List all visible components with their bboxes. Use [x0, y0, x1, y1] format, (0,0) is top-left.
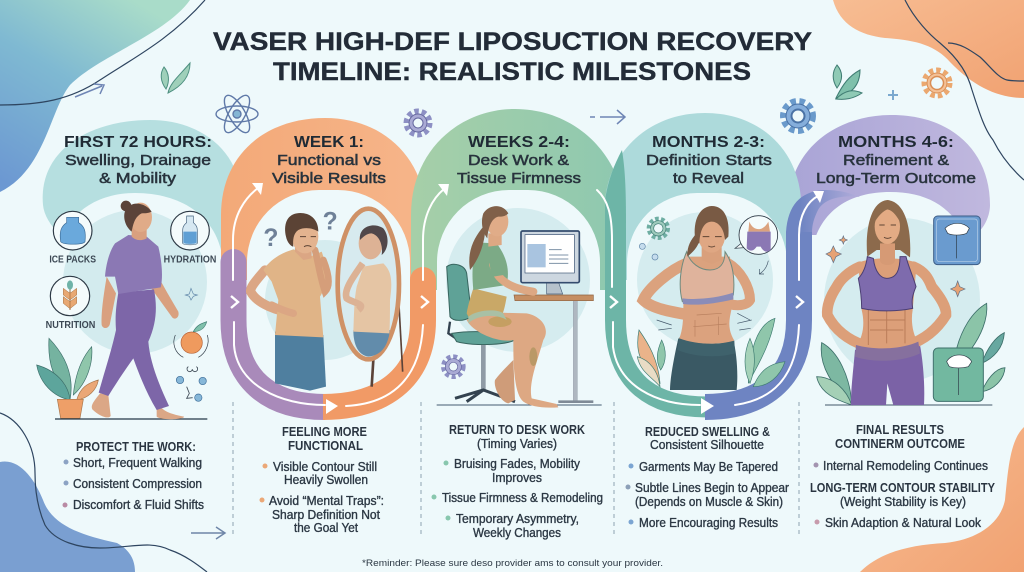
icon: gear purple	[406, 111, 430, 135]
heading: week 1: Visible Results	[272, 170, 386, 187]
heading: weeks 2-4: WEEKS 2-4:	[468, 134, 570, 151]
dividers	[233, 402, 799, 537]
figure: woman walking	[92, 201, 184, 419]
band: orange U	[323, 280, 423, 407]
icon: ice packs: ICE PACKS	[49, 254, 96, 265]
text block: final results: LONG-TERM CONTOUR STABILITY	[810, 481, 996, 495]
band arrows	[231, 183, 824, 414]
heading: months 4-6: MONTHS 4-6:	[838, 134, 954, 151]
text block: reduced swelling: REDUCED SWELLING &	[645, 425, 770, 439]
text block: return to desk work	[432, 423, 603, 540]
text block: reduced swelling: Subtle Lines Begin to Appear	[635, 481, 789, 495]
text block: feeling more functional: Sharp Definition Not	[272, 508, 380, 522]
text block: return to desk work: (Timing Varies)	[477, 437, 557, 451]
blob: top right	[833, 0, 1024, 98]
motion lines	[657, 313, 752, 330]
heading: first 72 hours: FIRST 72 HOURS:	[64, 134, 212, 151]
icon: plant	[37, 338, 98, 418]
panel: first 72 hours window	[58, 193, 222, 420]
heading: first 72 hours	[64, 134, 212, 187]
text block: feeling more functional: the Goal Yet	[294, 521, 358, 535]
title: TIMELINE: REALISTIC MILESTONES	[273, 58, 751, 86]
text block: return to desk work: Temporary Asymmetry,	[456, 512, 579, 526]
heading: months 2-3: MONTHS 2-3:	[652, 134, 765, 151]
text block: feeling more functional: Avoid “Mental Traps”:	[269, 494, 384, 508]
ground line	[55, 417, 207, 421]
icon: question marks: ?	[263, 225, 278, 252]
figure: woman in tan shirt	[251, 213, 329, 391]
icon: top left leaves	[161, 63, 190, 93]
text block: reduced swelling: Consistent Silhouette	[650, 438, 764, 452]
text block: final results: FINAL RESULTS	[856, 423, 944, 437]
icon: scale blue	[934, 216, 980, 265]
panel: months 4-6 arch	[788, 115, 990, 250]
reminder footnote: *Reminder: Please sure deso provider ams to consult your provider.	[362, 558, 663, 569]
blob: bottom right	[860, 427, 1024, 572]
heading: weeks 2-4: Tissue Firmness	[457, 170, 581, 187]
figure group: week 1	[251, 208, 403, 391]
icon: callout	[735, 216, 778, 274]
panel: months 2-3 arch	[605, 113, 801, 280]
band: blue curve into months 4-6	[786, 190, 860, 232]
text block: reduced swelling: (Depends on Muscle & Skin)	[635, 495, 783, 509]
heading: months 4-6: Long-Term Outcome	[816, 170, 976, 187]
text block: final results: (Weight Stability is Key)	[840, 495, 966, 509]
heading: months 4-6: Refinement &	[843, 152, 949, 169]
icon: nutrition: NUTRITION	[46, 320, 95, 331]
text block: protect the work: Consistent Compression	[73, 477, 202, 491]
panel: weeks 2-4 window	[437, 190, 600, 405]
title: VASER HIGH-DEF LIPOSUCTION RECOVERY	[213, 28, 812, 56]
band: blue U	[705, 232, 799, 407]
panel: first 72 hours background	[43, 120, 241, 260]
text block: feeling more functional	[260, 425, 384, 535]
text block: protect the work	[62, 440, 204, 512]
text block: protect the work: Discomfort & Fluid Shifts	[73, 498, 204, 512]
icon: scale green	[933, 348, 983, 401]
icon: question marks	[263, 208, 338, 252]
band: purple U rounded top	[220, 249, 246, 262]
heading: week 1: Functional vs	[277, 152, 381, 169]
title	[213, 28, 812, 86]
text block: final results	[810, 423, 996, 530]
icon: gear blue	[783, 101, 813, 131]
panel: week 1 window	[247, 190, 410, 405]
panel: months 4-6 window	[812, 192, 1000, 400]
text block: final results: Skin Adaption & Natural Look	[825, 516, 982, 530]
heading: week 1: WEEK 1:	[294, 134, 364, 151]
chair	[447, 264, 517, 402]
ground line	[825, 403, 992, 406]
icon: gear small	[649, 219, 668, 238]
desk	[514, 295, 593, 402]
band: purple U	[234, 262, 325, 407]
figure group: months 2-3	[637, 206, 785, 390]
heading: first 72 hours: & Mobility	[99, 170, 177, 187]
arrow: top left	[75, 84, 104, 97]
figure: woman lifting top	[643, 206, 750, 390]
panel: week 1 arch	[221, 118, 426, 280]
icon: ice packs	[49, 211, 96, 265]
icon: atom	[216, 92, 258, 136]
text block: protect the work: PROTECT THE WORK:	[76, 440, 196, 454]
blob: bottom left	[0, 462, 135, 572]
figure group: weeks 2-4	[437, 206, 602, 408]
icon: hydration	[164, 211, 216, 265]
text block: protect the work: Short, Frequent Walking	[73, 456, 202, 470]
text block: return to desk work: RETURN TO DESK WORK	[449, 423, 585, 437]
icon: top right leaves	[833, 65, 862, 99]
sparkles	[826, 236, 965, 297]
icon: gear lower left	[443, 357, 463, 377]
text block: return to desk work: Improves	[492, 471, 542, 485]
band: orange U rounded top	[410, 267, 436, 280]
figure group: months 4-6	[817, 200, 1005, 405]
text block: feeling more functional: FUNCTIONAL	[288, 439, 363, 453]
heading: first 72 hours: Swelling, Drainage	[65, 152, 211, 169]
text block: reduced swelling: More Encouraging Results	[639, 516, 778, 530]
heading: weeks 2-4: Desk Work &	[468, 152, 569, 169]
text block: return to desk work: Weekly Changes	[473, 526, 561, 540]
plants	[817, 303, 1005, 405]
panel: weeks 2-4 arch	[411, 109, 626, 290]
text block: final results: CONTINERM OUTCOME	[835, 437, 965, 451]
text block: reduced swelling	[626, 425, 789, 530]
heading: week 1	[272, 134, 386, 187]
monitor	[521, 231, 579, 294]
text block: feeling more functional: Visible Contour Still	[273, 460, 377, 474]
heading: months 2-3: Definition Starts	[646, 152, 772, 169]
text block: feeling more functional: FEELING MORE	[282, 425, 367, 439]
icon: plus	[888, 90, 898, 100]
text block: feeling more functional: Heavily Swollen	[284, 473, 368, 487]
heading: weeks 2-4	[457, 134, 581, 187]
figure: woman standing	[827, 200, 946, 405]
heading: months 2-3	[646, 134, 772, 187]
icon: leaves right	[745, 318, 785, 387]
icon: leaves left	[637, 330, 665, 387]
floor line	[437, 403, 602, 406]
icon: dots	[639, 243, 658, 260]
text block: return to desk work: Tissue Firmness & Remodeling	[442, 491, 603, 505]
panel: arch overlap	[605, 150, 626, 235]
blob: top left	[0, 0, 190, 192]
band: green U	[616, 230, 707, 407]
arrow: bottom left	[191, 527, 225, 539]
icon: hydration: HYDRATION	[164, 254, 216, 265]
figure group: first 72 hours	[37, 201, 216, 419]
panel: first 72 hours inner circle	[63, 210, 207, 354]
text block: reduced swelling: Garments May Be Tapered	[639, 460, 778, 474]
text block: final results: Internal Remodeling Continues	[823, 459, 988, 473]
icon: question marks: ?	[323, 208, 338, 235]
figure: mirror	[338, 209, 403, 387]
heading: months 4-6	[816, 134, 976, 187]
text block: return to desk work: Bruising Fades, Mobility	[454, 457, 581, 471]
icon: nutrition	[46, 276, 95, 331]
inner circles	[265, 208, 980, 382]
icon: apple and molecules	[174, 288, 208, 401]
figure: seated woman	[467, 206, 558, 408]
icon: gear orange	[924, 70, 950, 96]
heading: months 2-3: to Reveal	[673, 170, 744, 187]
arrow: top middle	[590, 110, 625, 124]
panel: months 2-3 window	[627, 193, 787, 405]
